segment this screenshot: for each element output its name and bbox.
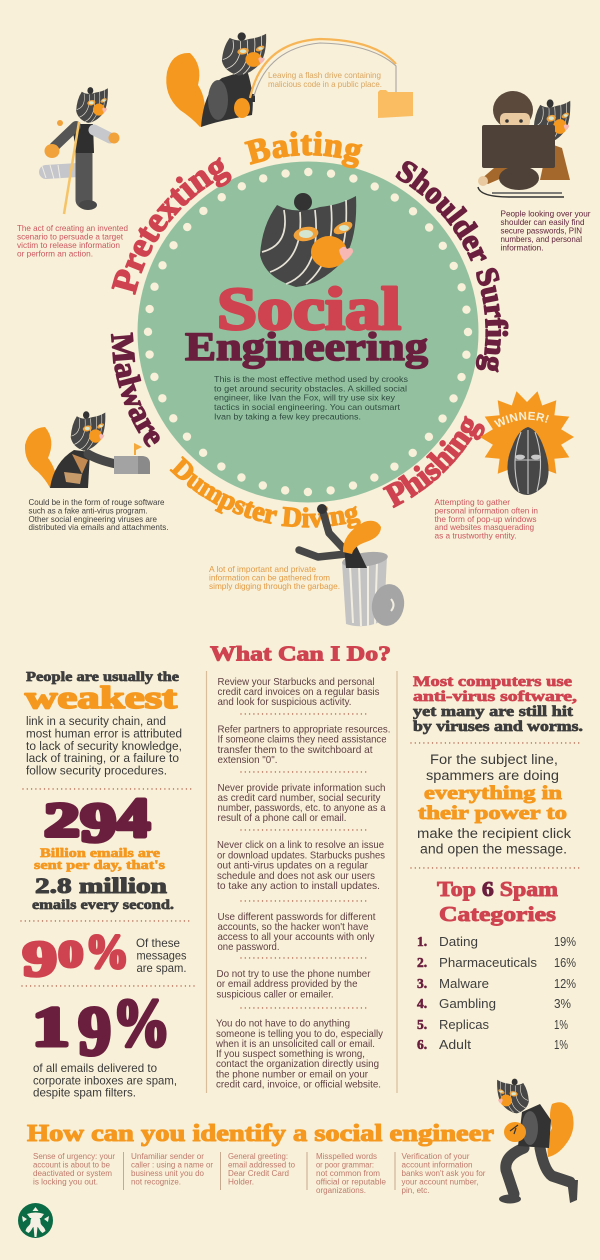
panel: top 6 spam categories: Adult [439,1038,472,1052]
panel: identification tips [33,1152,486,1195]
text: baiting description: malicious code in a public place. [268,80,382,89]
tip 1: Review your Starbucks and personal [218,677,374,688]
panel: top 6 spam categories: 2. [417,955,427,970]
text: baiting description: Leaving a flash drive containing [268,71,381,80]
tip 7: credit card, invoice, or official website. [216,1080,381,1090]
panel: top 6 spam categories: Top 6 Spam [437,877,559,901]
tip: unfamiliar sender: Unfamiliar sender or [131,1152,204,1161]
panel: what can I do tips [206,671,397,1093]
panel: top 6 spam categories: Malware [439,977,489,991]
panel: 90% spam stat: Of these [136,936,180,950]
text: malware description [28,498,168,532]
panel: top 6 spam categories: Gambling [439,997,496,1011]
tip 5: access to all your accounts with only [218,932,375,943]
tip: general greeting: General greeting: [228,1152,288,1161]
panel: 19% corporate inboxes stat: of all emails delivered to [33,1061,157,1075]
tip 7 [215,1018,384,1090]
text: pretexting description: victim to release information [17,241,120,250]
tip: verification: your account number, [402,1178,478,1186]
panel: top 6 spam categories: 16% [554,956,576,970]
panel: subject line stat: everything in [424,783,563,804]
panel: 90% spam stat: % [86,924,129,978]
intro text block: This is the most effective method used by crooks [214,374,408,384]
tip 3: number, passwords, etc. to anyone as a [218,803,386,814]
tip 4 [217,840,385,892]
panel: weakest link stat: follow security procedures. [26,764,167,778]
tip: unfamiliar sender [131,1152,213,1186]
panel: subject line stat: and open the message. [420,842,567,856]
tip: general greeting: email addressed to [228,1160,296,1170]
panel: 294 billion emails stat: Billion emails are [40,845,160,860]
panel: subject line stat: make the recipient click [417,826,571,841]
panel: 19% corporate inboxes stat: 1 [32,997,70,1058]
tip 5: Use different passwords for different [218,912,376,923]
text: shoulder surfing description: People looking over your [500,210,591,218]
panel: 294 billion emails stat: 2 [44,793,79,846]
tip: sense of urgency [33,1152,115,1186]
tip 4: or download updates. Starbucks pushes [217,850,385,862]
illustration: running fox with loot [497,1079,578,1204]
tip 4: schedule and does not ask our users [217,871,375,882]
panel: 19% corporate inboxes stat: despite spam filters. [33,1086,136,1100]
text: phishing description: Attempting to gather [434,498,510,507]
tip 5: one password. [218,942,280,953]
text: shoulder surfing description [500,210,591,252]
tip 1: and look for suspicious activity. [218,697,352,708]
text: phishing description: as a trustworthy entity. [434,532,516,540]
text: malware description: such as a fake anti-virus program. [28,506,148,516]
panel: anti-virus stat: anti-virus software, [413,689,577,705]
curved heading: Dumpster Diving: Dumpster Diving [170,456,361,529]
text: baiting description [268,71,382,89]
panel: top 6 spam categories [417,877,576,1052]
text: shoulder surfing description: shoulder can easily find [500,218,585,227]
heading: how can you identify: How can you identify a social engineer [27,1121,494,1147]
tip 4: out anti-virus updates on a regular [217,860,369,872]
panel: top 6 spam categories: 4. [417,996,427,1011]
panel: anti-virus stat: by viruses and worms. [413,719,583,735]
illustration: fox in dumpster trash can [299,504,407,628]
panel: anti-virus stat [413,674,583,735]
panel: anti-virus stat: Most computers use [413,674,573,690]
tip 2: transfer them to the switchboard at [218,745,373,756]
text: pretexting description [17,224,128,258]
tip 7: the phone number or email on your [216,1070,369,1080]
panel: 19% corporate inboxes stat: 9 [78,992,111,1070]
curved heading: Malware: Malware [110,332,160,448]
heading: What Can I Do?: What Can I Do? [210,642,391,666]
tip 7: when it is an unsolicited call or email. [215,1039,375,1050]
illustration: baiting fox with fishing rod [166,32,413,127]
panel: weakest link stat: weakest [25,679,177,715]
intro text block: to get around security obstacles. A skilled social [214,383,407,393]
panel: top 6 spam categories: Dating [439,935,478,949]
tip 7: If you suspect something is wrong, [216,1049,365,1060]
panel: weakest link stat: People are usually the [26,670,179,685]
tip 7: someone is telling you to do, especially [216,1029,384,1040]
text: pretexting description: or perform an action. [17,250,93,258]
intro text block: Ivan by taking a few key precautions. [214,411,361,421]
text: malware description: distributed via emails and attachments. [28,523,168,532]
tip: sense of urgency: is locking you out. [33,1178,98,1186]
tip 7: You do not have to do anything [216,1018,350,1030]
panel: top 6 spam categories: 3. [417,976,427,991]
tip: misspelled words: official or reputable [316,1178,387,1186]
logo: Starbucks [18,1203,53,1238]
tip 1: credit card invoices on a regular basis [218,687,380,698]
panel: anti-virus stat: yet many are still hit [413,704,573,720]
panel: weakest link stat: link in a security chain, and [26,714,166,728]
panel: subject line stat: spammers are doing [426,768,559,783]
title: Social [217,276,401,342]
panel: weakest link stat [25,670,182,778]
tip: verification: pin, etc. [402,1186,430,1195]
tip 7: contact the organization directly using [216,1059,379,1070]
curved heading: Phishing: Phishing [382,416,485,508]
panel: weakest link stat: to lack of security knowledge, [26,739,182,753]
text: shoulder surfing description: secure passwords, PIN [500,226,582,236]
panel: top 6 spam categories: Categories [439,902,556,926]
tip 3: result of a phone call or email. [218,813,346,824]
tip 6: or email address provided by the [216,979,358,990]
panel: 294 billion emails stat: 2.8 million [35,873,167,898]
text: pretexting description: scenario to persuade a target [17,232,124,242]
icon: central fox head [260,193,356,287]
tip: verification: banks won't ask you for [402,1169,486,1178]
tip: misspelled words: not common from [316,1169,380,1178]
panel: 19% corporate inboxes stat: % [112,985,170,1061]
intro text block: tactics in social engineering. You can outsmart [214,402,401,412]
panel: top 6 spam categories: 1% [554,1018,568,1032]
tip: verification: Verification of your [402,1152,470,1161]
tip 2: Refer partners to appropriate resources. [218,724,390,736]
panel: 294 billion emails stat: sent per day, that's [34,857,165,872]
tip 3 [218,783,386,824]
tip: misspelled words: organizations. [316,1186,366,1195]
tip: verification: account information [402,1160,472,1170]
panel: subject line stat [417,752,571,856]
tip: general greeting: Holder. [228,1178,254,1186]
tip: unfamiliar sender: caller : using a name or [131,1160,213,1170]
panel: 19% corporate inboxes stat [32,985,177,1100]
tip 4: Never click on a link to resolve an issue [217,840,384,851]
tip: misspelled words: Misspelled words [316,1152,377,1161]
text: phishing description: the form of pop-up windows [434,515,536,524]
tip 2 [218,724,390,766]
panel: top 6 spam categories: 1. [417,934,427,949]
text: shoulder surfing description: numbers, and personal [500,235,582,244]
tip: general greeting [228,1152,296,1186]
panel: top 6 spam categories: Pharmaceuticals [439,956,537,970]
panel: 90% spam stat: 9 [22,931,57,987]
tip 6: suspicious caller or emailer. [216,990,334,1000]
tip 4: to take any action to install updates. [217,881,380,892]
tip: unfamiliar sender: not recognize. [131,1178,181,1186]
panel: 19% corporate inboxes stat: corporate inboxes are spam, [33,1074,177,1088]
panel: 90% spam stat [22,924,186,987]
text: pretexting description: The act of creating an invented [17,224,128,233]
illustration: pretexting fox on crutch [42,87,120,214]
panel: 294 billion emails stat [32,788,174,913]
tip: misspelled words: or poor grammar: [316,1160,374,1170]
tip 2: If someone claims they need assistance [218,734,387,746]
panel: top 6 spam categories: 19% [554,935,576,949]
panel: 90% spam stat: messages [136,948,186,962]
tip: sense of urgency: Sense of urgency: your [33,1152,115,1161]
intro text block: engineer, like Ivan the Fox, will try use six key [214,393,396,403]
tip: misspelled words [316,1152,387,1195]
intro text block [214,374,408,421]
tip: sense of urgency: deactivated or system [33,1169,112,1178]
panel: 294 billion emails stat: 4 [117,788,150,849]
text: shoulder surfing description: information. [500,244,544,252]
curved heading: Shoulder Surfing: Shoulder Surfing [395,161,509,373]
text: dumpster diving description: simply digging through the garbage. [209,582,340,591]
panel: 294 billion emails stat: emails every second. [32,898,174,913]
tip 3: Never provide private information such [218,783,386,794]
text: malware description: Other social engineering viruses are [28,515,157,524]
illustration: malware fox with mailbox [25,411,150,488]
panel: top 6 spam categories: Replicas [439,1018,489,1032]
title [185,276,428,369]
tip 6: Do not try to use the phone number [216,969,371,980]
text: phishing description: personal information often in [434,506,538,516]
text: dumpster diving description [209,565,340,591]
panel: weakest link stat: lack of training, or a failure to [26,751,179,765]
green circle panel [138,162,478,502]
tip 3: as credit card number, social security [218,793,381,804]
panel: top 6 spam categories: 3% [554,997,571,1011]
tip: unfamiliar sender: business unit you do [131,1169,205,1178]
tip 2: extension "0". [218,755,278,766]
tip 5: accounts, so the hacker won't have [218,922,369,933]
tip 5 [218,912,376,953]
panel: top 6 spam categories: 12% [554,977,576,991]
curved heading: Baiting: Baiting [244,130,363,168]
illustration: winner burst and masked head: WINNER! [494,412,549,428]
tip 6 [216,969,371,1000]
text: malware description: Could be in the form of rouge software [28,498,165,507]
tip: verification [402,1152,486,1195]
text: dumpster diving description: information can be gathered from [209,574,330,582]
title: Engineering [185,324,428,369]
illustration: shoulder surfing [478,91,570,197]
tip: sense of urgency: account is about to be [33,1160,111,1170]
illustration: winner burst and masked head [480,391,574,495]
panel: top 6 spam categories: 1% [554,1038,568,1052]
panel: top 6 spam categories: 5. [417,1017,427,1032]
panel: subject line stat: For the subject line, [430,752,558,767]
text: dumpster diving description: A lot of important and private [209,565,316,574]
panel: 90% spam stat: are spam. [136,961,186,975]
curved heading: Pretexting: Pretexting [111,157,232,295]
panel: 90% spam stat: 0 [58,934,83,975]
panel: 294 billion emails stat: 9 [80,792,116,853]
text: phishing description: and websites masquerading [434,523,535,532]
panel: subject line stat: their power to [418,803,567,824]
panel: top 6 spam categories: 6. [417,1037,427,1052]
text: phishing description [434,498,538,540]
panel: weakest link stat: most human error is attributed [26,726,182,740]
tip: general greeting: Dear Credit Card [228,1169,289,1178]
tip 1 [218,677,380,708]
